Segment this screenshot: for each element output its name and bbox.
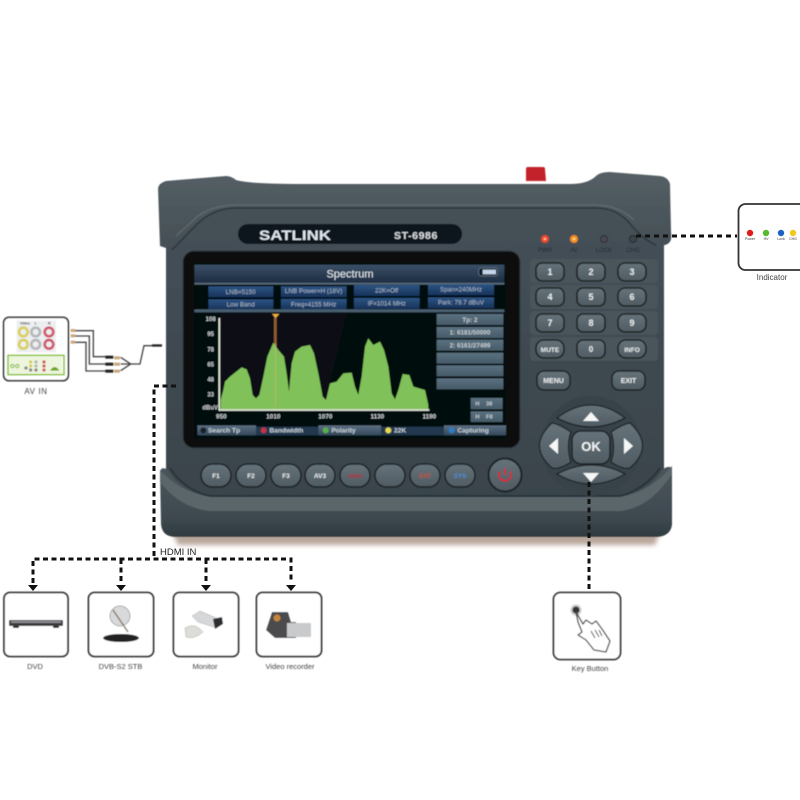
parameter buttons <box>208 284 494 310</box>
screen <box>194 263 506 438</box>
brand logo: SATLINK <box>259 228 331 243</box>
yellow dot key <box>385 427 391 433</box>
keypad: MENU <box>543 378 564 385</box>
side soft keys: 38 <box>486 401 492 407</box>
up key <box>557 405 625 427</box>
side soft keys: H <box>475 415 479 421</box>
function keys: HDMI <box>348 474 362 480</box>
device card: Monitor: Monitor <box>192 662 218 671</box>
bumper ridge <box>172 208 656 250</box>
function keys: F2 <box>247 473 255 480</box>
parameter buttons: Low Band <box>227 302 255 309</box>
parameter buttons: Freq=4155 MHz <box>291 302 336 309</box>
red dot key <box>261 427 267 433</box>
AV IN callout <box>4 317 162 396</box>
function bar: Search Tp <box>208 428 240 435</box>
red antenna connector <box>526 167 546 181</box>
parameter buttons: LNB=5150 <box>226 289 256 296</box>
x axis labels: 950 <box>216 414 227 421</box>
side soft keys <box>471 398 503 422</box>
indicator callout: HV <box>764 237 769 241</box>
function bar: 22K <box>394 428 406 435</box>
axes <box>219 318 429 410</box>
side soft keys: H <box>475 401 479 407</box>
transponder list: Tp: 2 <box>462 317 478 324</box>
top bumper <box>158 172 671 250</box>
icon: finger pressing <box>570 604 610 652</box>
parameter buttons: IF=1014 MHz <box>368 301 406 308</box>
indicator LEDs <box>538 235 640 254</box>
function bar <box>197 425 506 435</box>
parameter buttons: 22K=Off <box>375 288 399 295</box>
function bar: Bandwidth <box>269 428 303 435</box>
bumper ridge band <box>160 466 672 511</box>
indicator LEDs: AV <box>570 248 578 254</box>
marker line <box>274 317 277 407</box>
function keys: AV3 <box>314 473 326 480</box>
device: satellite meter <box>158 167 672 545</box>
device card: Video recorder <box>256 592 322 671</box>
x axis labels: 1010 <box>266 414 281 421</box>
indicator LEDs: PWR <box>538 248 553 254</box>
arrows <box>549 412 633 482</box>
keypad: 1 <box>547 267 553 277</box>
keypad: 2 <box>588 267 594 277</box>
blue dot key <box>449 427 455 433</box>
Key Button callout: Key Button <box>572 664 608 673</box>
keypad: 5 <box>588 292 594 302</box>
HDMI IN label: HDMI IN <box>160 547 197 558</box>
connector: HDMI dashed bus <box>33 386 291 583</box>
left key <box>540 423 571 468</box>
cables <box>74 331 157 371</box>
device card: Monitor <box>174 592 238 671</box>
keypad: 4 <box>547 292 553 302</box>
AV IN callout: R <box>48 321 51 325</box>
function keys: F3 <box>282 473 290 480</box>
y axis labels: 48 <box>207 378 215 384</box>
keypad: MUTE <box>541 347 560 354</box>
screen sheen <box>220 313 347 409</box>
x axis labels: 1190 <box>422 414 437 421</box>
transponder list: 2: 6161/27499 <box>450 343 491 350</box>
title bar: Spectrum <box>326 268 374 280</box>
y axis labels <box>202 317 218 411</box>
connector: indicator dashed line <box>636 234 737 238</box>
navigation pad: OK <box>581 439 601 454</box>
connector: key button dashed line <box>588 482 590 590</box>
keypad <box>530 259 658 390</box>
AV IN callout: AV IN <box>24 387 48 396</box>
title bar <box>194 265 504 283</box>
bottom bumper <box>160 467 672 537</box>
indicator LEDs: LOCK <box>596 248 612 254</box>
Key Button callout <box>554 592 620 673</box>
green spectrum trace <box>221 338 428 409</box>
indicator callout: Power <box>745 237 756 241</box>
marker <box>272 314 279 318</box>
function keys: SYS <box>453 473 467 480</box>
green dot key <box>323 427 329 433</box>
device card: DVD: DVD <box>27 662 43 671</box>
indicator LEDs: CHG <box>626 248 640 254</box>
keypad: 0 <box>589 345 594 354</box>
down key <box>557 465 625 484</box>
logo plate <box>238 224 462 244</box>
indicator callout: CHG <box>789 237 797 241</box>
x axis labels: 1130 <box>370 414 385 421</box>
keypad: 9 <box>629 318 635 328</box>
parameter buttons: Park: 79.7 dBuV <box>438 300 485 307</box>
side soft keys: F8 <box>486 415 493 421</box>
keypad: 3 <box>629 267 635 277</box>
keypad: EXIT <box>621 378 637 385</box>
black dot key <box>200 427 206 433</box>
battery icon <box>479 268 498 276</box>
keypad: 6 <box>629 292 635 302</box>
indicator callout: Indicator <box>757 273 788 282</box>
y axis labels: dBuV <box>202 405 218 411</box>
y axis labels: 65 <box>207 362 215 368</box>
OK key <box>572 431 610 464</box>
keypad: 7 <box>547 318 553 328</box>
arrowheads <box>28 585 296 591</box>
y axis labels: 95 <box>207 332 215 338</box>
function keys: SAT <box>419 473 431 480</box>
device card: Video recorder: Video recorder <box>265 662 315 671</box>
parameter buttons: LNB Power=H (18V) <box>285 288 342 295</box>
device body <box>166 190 664 510</box>
y axis labels: 108 <box>206 317 216 323</box>
device card: DVB-S2 STB: DVB-S2 STB <box>99 662 142 671</box>
screen bezel <box>183 251 520 448</box>
function keys: F1 <box>212 473 220 480</box>
function keys <box>201 464 475 487</box>
y axis labels: 33 <box>207 393 215 399</box>
right key <box>611 423 642 468</box>
transponder list <box>437 314 503 389</box>
device card: DVB-S2 STB <box>88 592 154 671</box>
keypad: INFO <box>624 347 640 354</box>
power button <box>488 458 522 492</box>
model name: ST-6986 <box>394 230 438 242</box>
AV IN callout: L <box>35 321 38 325</box>
parameter buttons: Span=240MHz <box>440 287 482 294</box>
spectrum chart <box>202 313 437 421</box>
navigation pad <box>540 396 642 496</box>
x axis labels: 1070 <box>318 414 333 421</box>
keypad: 8 <box>588 318 594 328</box>
y axis labels: 78 <box>207 347 215 353</box>
indicator callout <box>738 204 800 282</box>
x axis labels <box>216 414 437 421</box>
function bar: Polarity <box>331 428 356 435</box>
device shadow <box>172 532 660 545</box>
function bar: Capturing <box>457 428 489 435</box>
indicator callout: Lock <box>777 237 785 241</box>
device card: DVD <box>4 592 68 671</box>
AV IN callout: Video <box>20 321 31 325</box>
transponder list: 1: 6181/50000 <box>450 330 491 337</box>
